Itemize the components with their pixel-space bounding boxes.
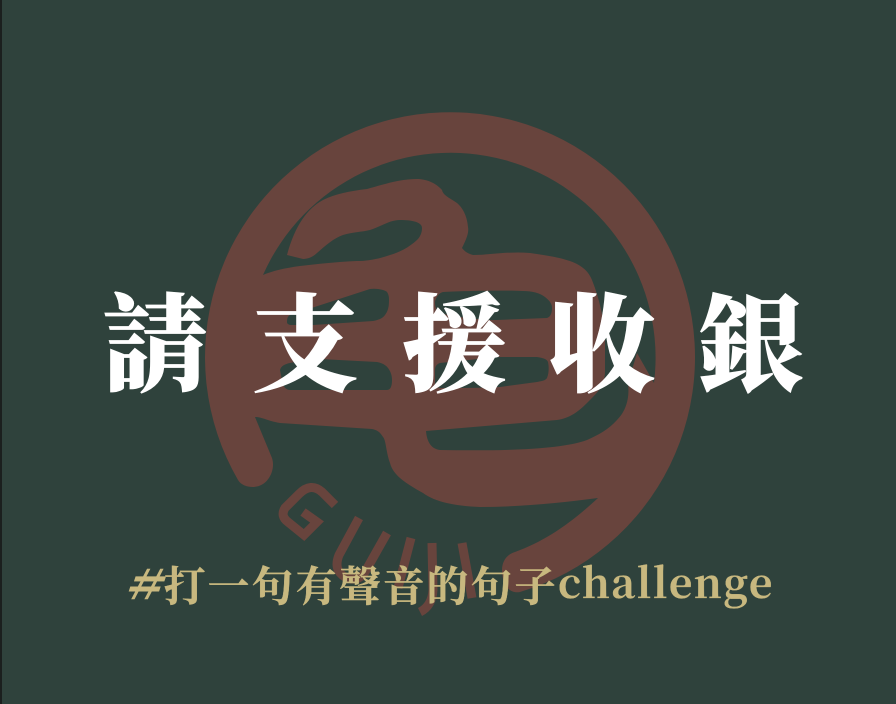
- title: 請支援收銀: 援: [401, 262, 507, 414]
- letter G: [283, 487, 335, 535]
- title: 請支援收銀: 銀: [698, 262, 804, 414]
- title: 請支援收銀: 支: [252, 262, 358, 414]
- letter J: [420, 543, 433, 612]
- subtitle: hashtag challenge line: 打一句有聲音的句子: [164, 553, 558, 613]
- logo lettering: GUIJI: [283, 487, 472, 612]
- letter I: [462, 543, 472, 598]
- title: 請支援收銀: 收: [549, 262, 655, 414]
- letter U: [337, 518, 387, 579]
- subtitle: hashtag challenge line: #: [122, 552, 175, 611]
- logo seal: ring and glyph: [205, 112, 695, 592]
- letter I: [398, 538, 411, 588]
- title: 請支援收銀: 請: [102, 262, 208, 414]
- subtitle: hashtag challenge line: challenge: [558, 551, 774, 610]
